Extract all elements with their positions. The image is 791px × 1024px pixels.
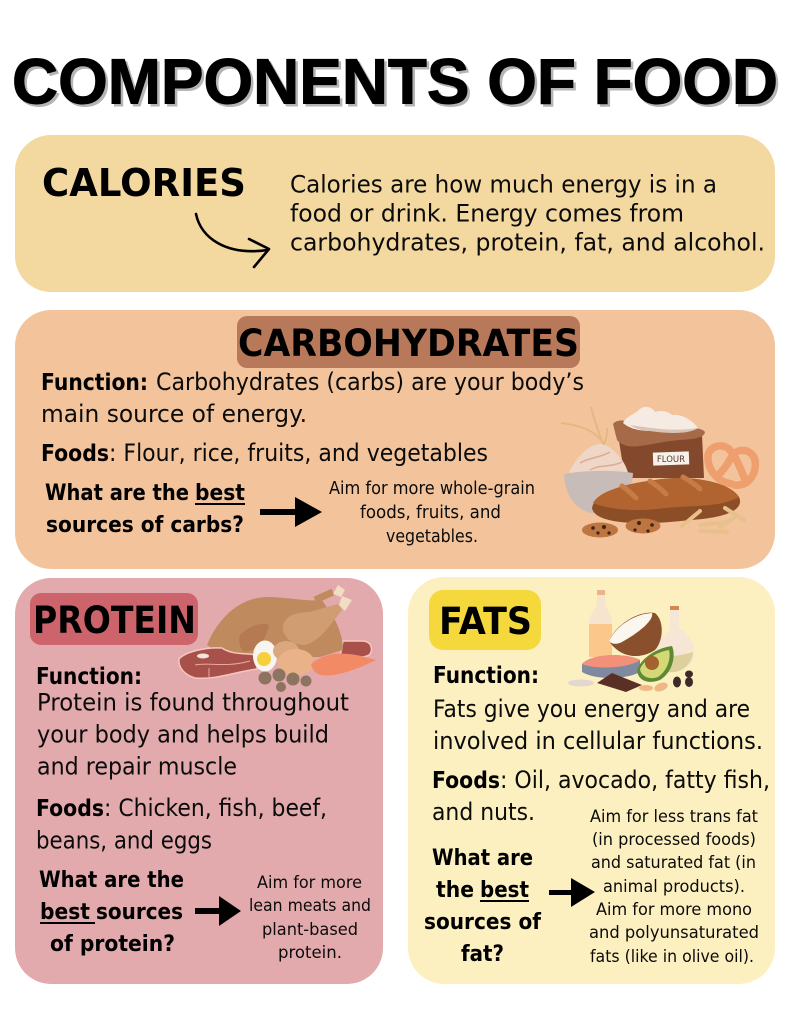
title: COMPONENTS OF FOOD <box>12 46 778 118</box>
protein answer <box>249 873 371 963</box>
arrow: fats question to answer <box>549 878 595 907</box>
protein question: What are the <box>39 867 184 893</box>
fats question <box>424 845 541 967</box>
protein heading: PROTEIN <box>33 599 196 642</box>
fats foods text <box>432 766 770 826</box>
carbohydrates function text: Carbohydrates (carbs) are your body’s <box>156 368 584 396</box>
fats answer: fats (like in olive oil). <box>590 947 754 967</box>
fats function text: Fats give you energy and are <box>433 695 750 723</box>
protein answer: protein. <box>278 943 342 963</box>
calories description: carbohydrates, protein, fat, and alcohol. <box>290 228 765 256</box>
carbohydrates question: sources of carbs? <box>46 512 244 538</box>
fats question: sources of <box>424 909 541 935</box>
protein function text: and repair muscle <box>37 752 237 780</box>
carbohydrates answer: Aim for more whole-grain <box>329 479 535 499</box>
protein question <box>39 867 184 957</box>
fats answer: Aim for more mono <box>596 900 752 920</box>
fats foods text: Foods <box>432 768 500 794</box>
carbohydrates function text: Function: <box>41 370 148 396</box>
icon: chicken, steak, eggs, salmon, nuts <box>179 585 376 692</box>
protein answer: plant-based <box>262 920 358 940</box>
fats answer: and polyunsaturated <box>589 923 759 943</box>
carbohydrates question <box>45 480 245 538</box>
carbohydrates answer: vegetables. <box>386 527 478 547</box>
calories description <box>290 170 765 256</box>
panel: protein <box>15 578 383 984</box>
arrow: carbs question to answer <box>260 497 322 527</box>
protein function text: Function: <box>36 664 142 690</box>
fats heading <box>429 590 541 650</box>
fats foods text: : Oil, avocado, fatty fish, <box>500 766 770 794</box>
protein foods text: Foods <box>36 796 104 822</box>
carbohydrates heading: CARBOHYDRATES <box>238 322 579 365</box>
fats function text: involved in cellular functions. <box>433 727 763 755</box>
fats answer: (in processed foods) <box>592 830 756 850</box>
fats foods text: and nuts. <box>432 798 535 826</box>
carbohydrates answer: foods, fruits, and <box>360 503 501 523</box>
protein foods text <box>36 794 327 854</box>
carbohydrates answer <box>329 479 535 547</box>
icon: flour, bread, pretzel, cookies <box>561 407 755 538</box>
carbohydrates foods text: : Flour, rice, fruits, and vegetables <box>109 439 488 467</box>
carbohydrates question: best <box>195 480 245 506</box>
fats function text <box>433 663 763 755</box>
fats question: fat? <box>461 941 504 967</box>
arrow: protein question to answer <box>195 896 241 926</box>
protein function text: your body and helps build <box>37 720 329 748</box>
fats answer: and saturated fat (in <box>591 853 756 873</box>
carbohydrates function text <box>41 368 584 428</box>
protein answer: Aim for more <box>257 873 362 893</box>
carbohydrates question: What are the <box>45 480 189 506</box>
fats heading: FATS <box>439 600 532 643</box>
title: COMPONENTS OF FOOD <box>14 48 780 120</box>
protein foods text: beans, and eggs <box>36 826 212 854</box>
protein foods text: : Chicken, fish, beef, <box>104 794 327 822</box>
fats question: the <box>436 877 474 903</box>
protein question: best <box>40 899 90 925</box>
fats answer <box>589 807 759 967</box>
calories description: food or drink. Energy comes from <box>290 200 684 228</box>
fats question: What are <box>432 845 533 871</box>
protein function text: Protein is found throughout <box>37 688 349 716</box>
carbohydrates foods text: Foods <box>41 441 109 467</box>
calories description: Calories are how much energy is in a <box>290 170 717 198</box>
icon: flour, bread, pretzel, cookies: FLOUR <box>657 455 685 465</box>
calories heading: CALORIES <box>42 161 246 205</box>
protein question: of protein? <box>50 931 175 957</box>
protein answer: lean meats and <box>249 896 371 916</box>
panel: carbohydrates <box>15 310 775 569</box>
icon: oils, coconut, salmon, avocado, chocolate <box>568 590 694 693</box>
fats function text: Function: <box>433 663 539 689</box>
fats question: best <box>480 877 529 903</box>
panel: fats <box>408 577 775 984</box>
protein function text <box>36 664 349 780</box>
carbohydrates function text: main source of energy. <box>41 400 307 428</box>
arrow: curved from heading to text <box>196 214 269 267</box>
panel: calories <box>15 135 775 292</box>
fats answer: Aim for less trans fat <box>590 807 758 827</box>
protein question: sources <box>96 899 183 925</box>
fats answer: animal products). <box>603 877 745 897</box>
